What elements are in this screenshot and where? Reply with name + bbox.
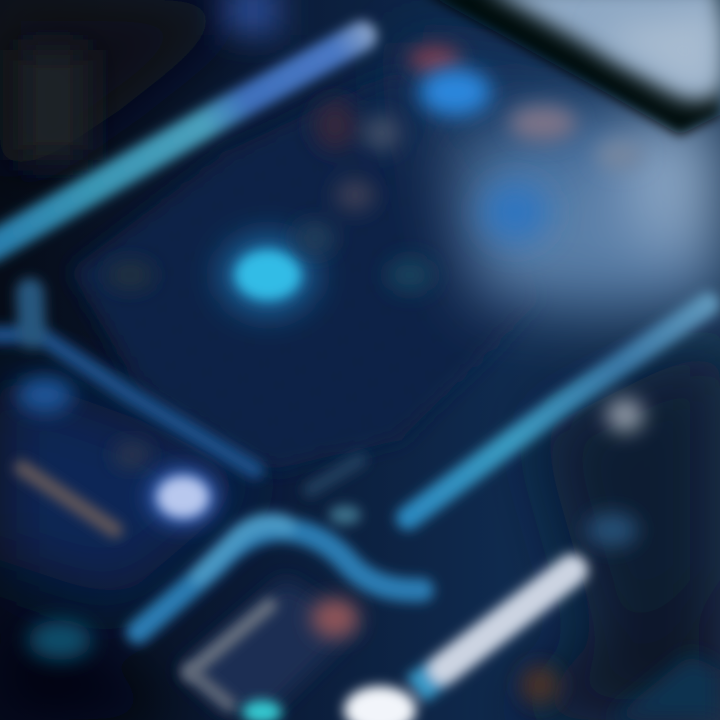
small muted markers bbox=[106, 99, 644, 293]
diagonal bar: upper left bbox=[0, 36, 362, 248]
lower chip panel bbox=[178, 578, 360, 720]
left circuit line bbox=[0, 292, 255, 470]
blue and red spot top bbox=[409, 46, 491, 116]
lower-right markers bbox=[520, 398, 720, 720]
left panel marks bbox=[17, 377, 150, 660]
wave line bbox=[138, 460, 422, 632]
blue haze spot bbox=[481, 182, 549, 242]
glowing cyan spot bbox=[220, 235, 316, 315]
white bar with cyan end bbox=[344, 570, 572, 720]
white glowing dot bbox=[147, 467, 219, 527]
hazy light area bbox=[400, 40, 720, 310]
top-left faint panels bbox=[18, 0, 280, 160]
diagonal bar: right bbox=[408, 304, 708, 518]
top-right device corner bbox=[420, 0, 720, 135]
textured centre screen bbox=[70, 70, 540, 470]
